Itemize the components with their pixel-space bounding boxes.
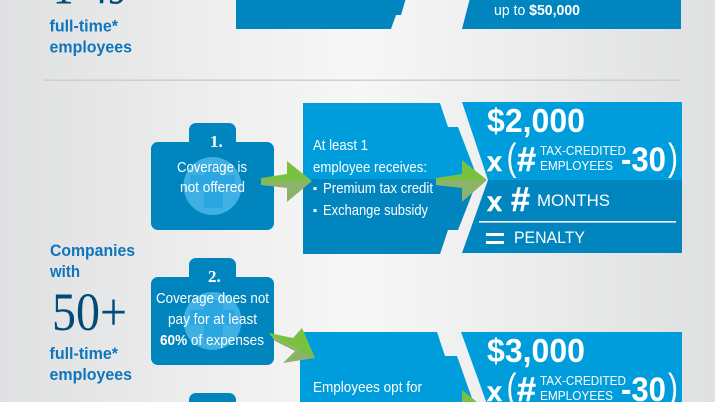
panel: $3,000 penalty formula: $3,000 [487, 332, 585, 369]
panel: top penalty: up to $50,000 [494, 3, 580, 19]
panel: $2,000 penalty formula: ( [506, 137, 517, 179]
panel: employees opt for [300, 332, 474, 402]
card: coverage below 60%: pay for at least [168, 312, 257, 328]
card: coverage not offered: Coverage is [177, 160, 247, 176]
panel: $2,000 penalty formula: x [487, 186, 502, 217]
heading: small companies: employees [50, 38, 132, 56]
panel: $2,000 penalty formula: MONTHS [537, 191, 610, 210]
card: coverage not offered: 1. [210, 132, 223, 151]
arrow: panel to $2,000 formula [436, 160, 487, 202]
card: coverage below 60% [151, 258, 274, 365]
panel: at least 1 employee receives: employee receives: [313, 160, 427, 176]
panel: top penalty [462, 0, 681, 29]
panel: $2,000 penalty formula: # [517, 141, 536, 179]
heading: companies with 50+: 50+ [52, 282, 127, 342]
heading: companies with 50+: Companies [50, 242, 135, 260]
panel: at least 1 employee receives: At least 1 [313, 138, 368, 154]
arrow: card 2 to lower panel [269, 328, 315, 363]
arrow: card 1 to panel [261, 161, 312, 202]
panel: $2,000 penalty formula: -30 [621, 141, 666, 179]
heading: companies with 50+: full-time* [50, 345, 119, 363]
panel: $2,000 penalty formula: # [511, 181, 530, 219]
panel: at least 1 employee receives: Exchange subsidy [323, 203, 429, 219]
icon: medical cross circle [184, 157, 242, 215]
card: coverage below 60%: 60% of expenses [160, 333, 264, 349]
heading: small companies: full-time* [50, 18, 119, 36]
card: third condition tab [189, 393, 236, 402]
heading: companies with 50+ [49, 242, 135, 384]
card: coverage below 60%: 2. [208, 267, 221, 286]
panel: $2,000 penalty formula: EMPLOYEES [540, 158, 613, 173]
panel: $2,000 penalty formula: x [487, 146, 502, 177]
panel: at least 1 employee receives: Premium tax credit [323, 181, 433, 197]
panel: at least 1 employee receives [303, 103, 478, 254]
arrow: lower panel to $3,000 formula [436, 390, 487, 402]
panel: $2,000 penalty formula: TAX-CREDITED [540, 143, 626, 158]
card: coverage below 60%: Coverage does not [156, 291, 269, 307]
icon: medical cross circle [184, 292, 242, 350]
panel: $2,000 penalty formula: $2,000 [487, 102, 585, 139]
card: coverage not offered: not offered [180, 180, 245, 196]
heading: small companies [50, 0, 132, 56]
panel: $3,000 penalty formula [461, 332, 682, 402]
panel: $3,000 penalty formula: TAX-CREDITED [540, 373, 626, 388]
heading: companies with 50+: with [49, 263, 80, 281]
panel: employees opt for: Employees opt for [313, 380, 422, 396]
heading: companies with 50+: employees [50, 366, 132, 384]
panel: $2,000 penalty formula [462, 102, 682, 253]
card: coverage not offered [151, 123, 274, 230]
panel: $2,000 penalty formula: PENALTY [514, 228, 585, 247]
panel: top condition [236, 0, 406, 29]
panel: $2,000 penalty formula: ) [668, 137, 678, 179]
